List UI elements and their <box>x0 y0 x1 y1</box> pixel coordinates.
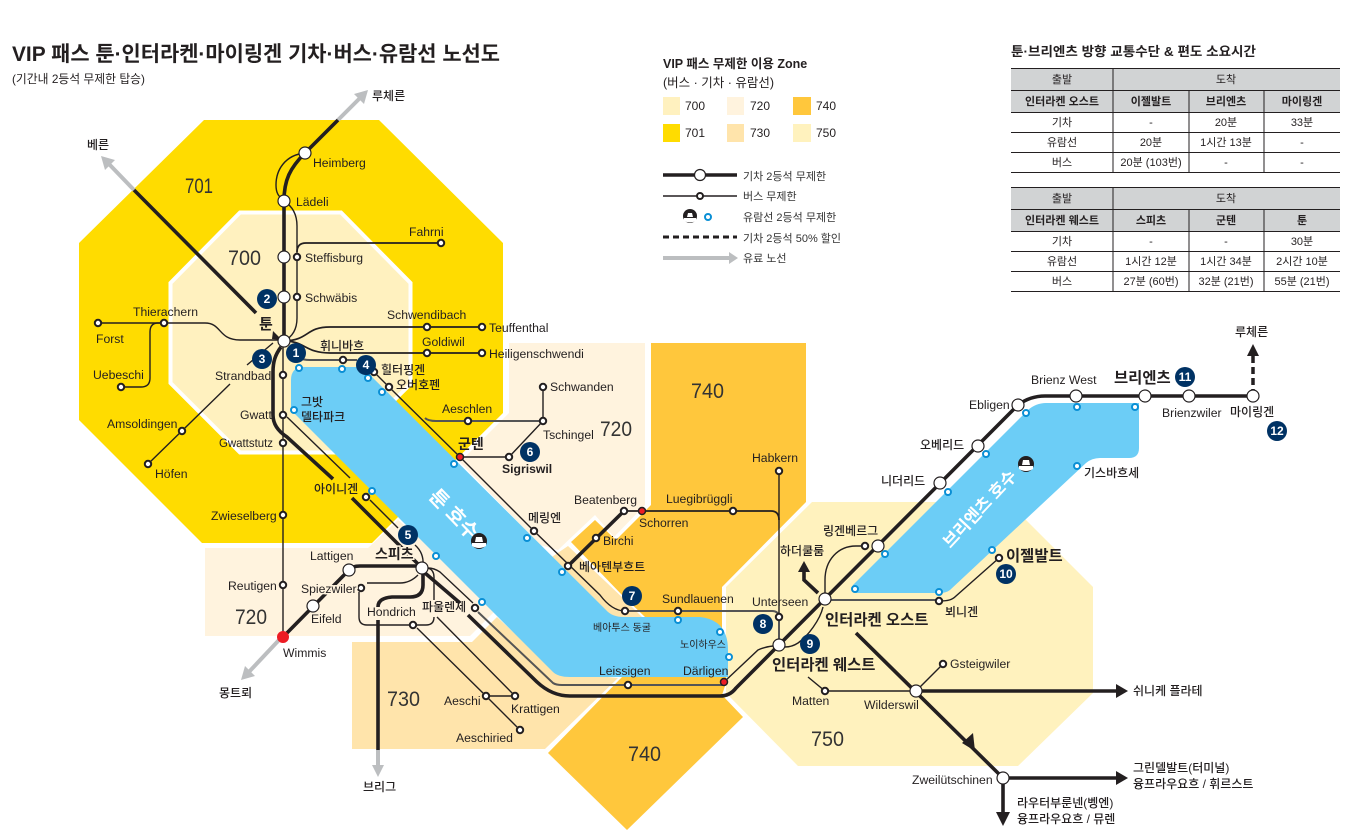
lake name: Thun: 툰 호수 <box>424 485 483 544</box>
number badges: 4 <box>363 358 370 372</box>
table: Interlaken West: 2시간 10분 <box>1276 255 1328 268</box>
station labels: 군텐 <box>458 436 484 452</box>
icon: boat on Lake Brienz <box>1018 456 1034 472</box>
station labels: 마이링겐 <box>1230 405 1274 419</box>
zone number labels: 730 <box>387 688 420 711</box>
station labels: Schorren <box>639 516 688 530</box>
station labels: 오버호펜 <box>396 378 440 392</box>
legend: zones: 701 <box>685 126 705 140</box>
number badges: 10 <box>999 567 1013 581</box>
station labels: 몽트뢰 <box>219 686 252 700</box>
station labels: Sigriswil <box>502 462 552 476</box>
zone 730 strip <box>540 546 645 620</box>
station labels <box>87 89 1274 826</box>
number badges: 1 <box>293 346 300 360</box>
station labels: Krattigen <box>511 702 560 716</box>
station labels: Matten <box>792 694 829 708</box>
station labels: Aeschi <box>444 694 481 708</box>
station labels: Amsoldingen <box>107 417 177 431</box>
station labels: 루체른 <box>1235 325 1268 339</box>
table: Interlaken West <box>1011 187 1340 292</box>
table: Interlaken Ost: 버스 <box>1052 156 1072 169</box>
station labels: Heimberg <box>313 156 366 170</box>
station labels: Habkern <box>752 451 798 465</box>
table: Interlaken West: - <box>1224 236 1228 248</box>
table: Interlaken West: 유람선 <box>1047 255 1077 268</box>
legend: zones: 750 <box>816 126 836 140</box>
paid grey routes <box>101 90 384 777</box>
station labels: 그밧 <box>301 395 323 409</box>
table: Interlaken Ost: - <box>1300 137 1304 149</box>
station labels: 인터라켄 웨스트 <box>772 656 875 674</box>
legend: zones: 700 <box>685 99 705 113</box>
station labels: 브리그 <box>363 780 396 794</box>
station labels: Beatenberg <box>574 493 637 507</box>
station labels: 베아투스 동굴 <box>593 622 651 634</box>
table: Interlaken Ost: 20분 (103번) <box>1120 156 1182 169</box>
table: Interlaken Ost: 인터라켄 오스트 <box>1025 95 1099 108</box>
table: Interlaken West: 1시간 12분 <box>1125 255 1177 268</box>
station labels: 스피츠 <box>375 546 414 562</box>
station labels: 뵈니겐 <box>945 605 978 619</box>
station labels: Lattigen <box>310 549 353 563</box>
station labels: Lädeli <box>296 195 329 209</box>
zone 740 north <box>571 343 806 640</box>
table: Interlaken Ost: 브리엔츠 <box>1206 95 1246 108</box>
station labels: Eifeld <box>311 612 342 626</box>
table: Interlaken Ost: 이젤발트 <box>1131 95 1171 108</box>
legend: zones <box>663 56 836 142</box>
lake name: Brienz: 브리엔츠 호수 <box>939 467 1021 552</box>
table: Interlaken Ost: 마이링겐 <box>1282 95 1322 108</box>
Lake Thun <box>291 367 728 677</box>
number badges: 8 <box>760 617 767 631</box>
station labels: Brienz West <box>1031 373 1097 387</box>
zone number labels: 740 <box>628 743 661 766</box>
station labels: Unterseen <box>752 595 808 609</box>
table: Interlaken West: 기차 <box>1052 235 1072 248</box>
station labels: Gwatt <box>240 408 272 422</box>
station labels: Höfen <box>155 467 188 481</box>
station labels: 아이니겐 <box>314 482 358 496</box>
zone 720 north <box>460 343 645 550</box>
station labels: Hondrich <box>367 605 416 619</box>
number badges: 5 <box>405 528 412 542</box>
table: Interlaken West: 스피츠 <box>1136 214 1166 227</box>
legend: line types: 유료 노선 <box>743 252 787 265</box>
station labels: Zweilütschinen <box>912 773 993 787</box>
station labels: 브리엔츠 <box>1114 369 1171 387</box>
station labels: 파울렌제 <box>422 600 466 614</box>
number badges: 12 <box>1270 424 1284 438</box>
table: Interlaken Ost: - <box>1149 117 1153 129</box>
station labels: 이젤발트 <box>1006 547 1063 565</box>
station labels: Gsteigwiler <box>950 657 1010 671</box>
Lake Brienz <box>851 403 1139 593</box>
zone number labels: 720 <box>235 606 267 629</box>
table: Interlaken West: 도착 <box>1216 192 1236 205</box>
legend: line types: 기차 2등석 50% 할인 <box>743 232 841 245</box>
station labels: 베아텐부흐트 <box>579 560 645 574</box>
station labels: Därligen <box>683 664 728 678</box>
station labels: 니더리드 <box>881 474 925 488</box>
number badges: 6 <box>527 445 534 459</box>
station labels: Fahrni <box>409 225 444 239</box>
legend: line types: 기차 2등석 무제한 <box>743 170 826 183</box>
table: Interlaken Ost: 33분 <box>1291 117 1313 129</box>
table: Interlaken West: 55분 (21번) <box>1274 275 1330 288</box>
table: Interlaken West: 인터라켄 웨스트 <box>1025 214 1099 227</box>
boat piers <box>291 365 1138 660</box>
station labels: Steffisburg <box>305 251 363 265</box>
zone number labels: 720 <box>600 418 632 441</box>
legend: zones: 740 <box>816 99 836 113</box>
train lines <box>134 120 1259 826</box>
station labels: Reutigen <box>228 579 277 593</box>
station labels: Heiligenschwendi <box>489 347 584 361</box>
station labels: Spiezwiler <box>301 582 357 596</box>
number badges: 9 <box>807 637 814 651</box>
station labels: 노이하우스 <box>680 638 726 651</box>
table: Interlaken West: 출발 <box>1052 192 1072 205</box>
station labels: Schwäbis <box>305 291 357 305</box>
zone number labels: 700 <box>228 247 261 270</box>
zone 700 <box>170 212 410 452</box>
zone number labels: 750 <box>811 728 844 751</box>
station labels: Luegibrüggli <box>666 492 732 506</box>
zone 720 south <box>205 520 500 636</box>
icon: boat on Lake Thun <box>471 533 487 549</box>
table: Interlaken West: 군텐 <box>1216 214 1236 227</box>
station labels: Wimmis <box>283 646 326 660</box>
zone 750 <box>726 502 1093 766</box>
legend: line types: 버스 무제한 <box>743 190 797 203</box>
table: Interlaken West: 1시간 34분 <box>1200 255 1252 268</box>
station labels: Birchi <box>603 534 633 548</box>
subtitle: (기간내 2등석 무제한 탑승) <box>12 72 145 86</box>
number badges: 11 <box>1179 370 1192 384</box>
table: Interlaken Ost: - <box>1224 157 1228 169</box>
station labels: 루체른 <box>372 89 405 103</box>
table: Interlaken West: 32분 (21번) <box>1198 275 1254 288</box>
zone number labels <box>185 175 844 766</box>
station labels: Uebeschi <box>93 368 144 382</box>
table: Interlaken West: 27분 (60번) <box>1123 275 1179 288</box>
station labels: 휘니바흐 <box>320 338 364 353</box>
table: Interlaken Ost: 1시간 13분 <box>1200 136 1252 149</box>
legend: zones: VIP 패스 무제한 이용 Zone <box>663 56 807 71</box>
station labels: Thierachern <box>133 305 198 319</box>
table heading: 툰·브리엔츠 방향 교통수단 & 편도 소요시간 <box>1011 44 1256 59</box>
station labels: 툰 <box>259 316 273 333</box>
station labels: Zwieselberg <box>211 509 277 523</box>
table: Interlaken West: 툰 <box>1297 214 1307 227</box>
number badges <box>252 289 1287 654</box>
station labels: 그린델발트(터미널) <box>1133 761 1229 775</box>
station labels: 링겐베르그 <box>823 524 878 538</box>
legend: zones: (버스 · 기차 · 유람선) <box>663 76 774 90</box>
bus stops <box>95 240 1002 733</box>
table: Interlaken Ost: 20분 <box>1215 117 1237 129</box>
bus lines <box>98 153 999 730</box>
station labels: Schwendibach <box>387 308 466 322</box>
station labels: 라우터부룬넨(벵엔) <box>1017 796 1113 810</box>
number badges: 2 <box>264 292 271 306</box>
train stations <box>278 147 1259 784</box>
zone number labels: 740 <box>691 380 724 403</box>
station labels: Wilderswil <box>864 698 919 712</box>
station labels: Leissigen <box>599 664 650 678</box>
station labels: 하더쿨룸 <box>780 544 824 558</box>
table: Interlaken Ost: - <box>1300 157 1304 169</box>
legend: line types <box>663 170 841 265</box>
station labels: Strandbad <box>215 369 271 383</box>
station labels: 베른 <box>87 138 109 152</box>
number badges: 7 <box>629 589 636 603</box>
station labels: Sundlauenen <box>662 592 734 606</box>
station labels: Schwanden <box>550 380 614 394</box>
station labels: Forst <box>96 332 124 346</box>
table: Interlaken Ost: 유람선 <box>1047 136 1077 149</box>
station labels: 융프라우요흐 / 뮤렌 <box>1017 812 1115 826</box>
station labels: 메링엔 <box>528 511 561 525</box>
zone 730 <box>352 617 618 749</box>
station labels: Aeschiried <box>456 731 513 745</box>
station labels: Gwattstutz <box>219 436 273 450</box>
station labels: Brienzwiler <box>1162 406 1222 420</box>
table: Interlaken Ost: 출발 <box>1052 73 1072 86</box>
station labels: 인터라켄 오스트 <box>825 611 928 629</box>
table: Interlaken Ost: 기차 <box>1052 116 1072 129</box>
station labels: 델타파크 <box>301 410 345 424</box>
table: Interlaken Ost <box>1011 68 1340 172</box>
legend: zones: 730 <box>750 126 770 140</box>
station labels: Tschingel <box>543 428 594 442</box>
station labels: 기스바흐세 <box>1084 466 1139 480</box>
station labels: Ebligen <box>969 398 1010 412</box>
zone map areas <box>79 120 1093 830</box>
table: Interlaken West: - <box>1149 236 1153 248</box>
red transfer stations <box>277 454 728 686</box>
station labels: 쉬니케 플라테 <box>1133 684 1203 698</box>
number badges: 3 <box>259 352 266 366</box>
table: Interlaken West: 버스 <box>1052 275 1072 288</box>
table: Interlaken West: 30분 <box>1291 236 1313 248</box>
legend: zones: 720 <box>750 99 770 113</box>
zone number labels: 701 <box>185 175 213 198</box>
station labels: Aeschlen <box>442 402 492 416</box>
table: Interlaken Ost: 도착 <box>1216 73 1236 86</box>
station labels: Teuffenthal <box>489 321 548 335</box>
table: Interlaken Ost: 20분 <box>1140 137 1162 149</box>
legend: line types: 유람선 2등석 무제한 <box>743 211 836 224</box>
station labels: 오베리드 <box>920 438 964 452</box>
title: VIP 패스 툰·인터라켄·마이링겐 기차·버스·유람선 노선도 <box>12 43 500 66</box>
station labels: Goldiwil <box>422 335 465 349</box>
station labels: 힐터핑겐 <box>381 363 425 377</box>
station labels: 융프라우요흐 / 휘르스트 <box>1133 776 1253 791</box>
zone 740 south <box>548 677 743 830</box>
zone 701 <box>79 120 503 543</box>
